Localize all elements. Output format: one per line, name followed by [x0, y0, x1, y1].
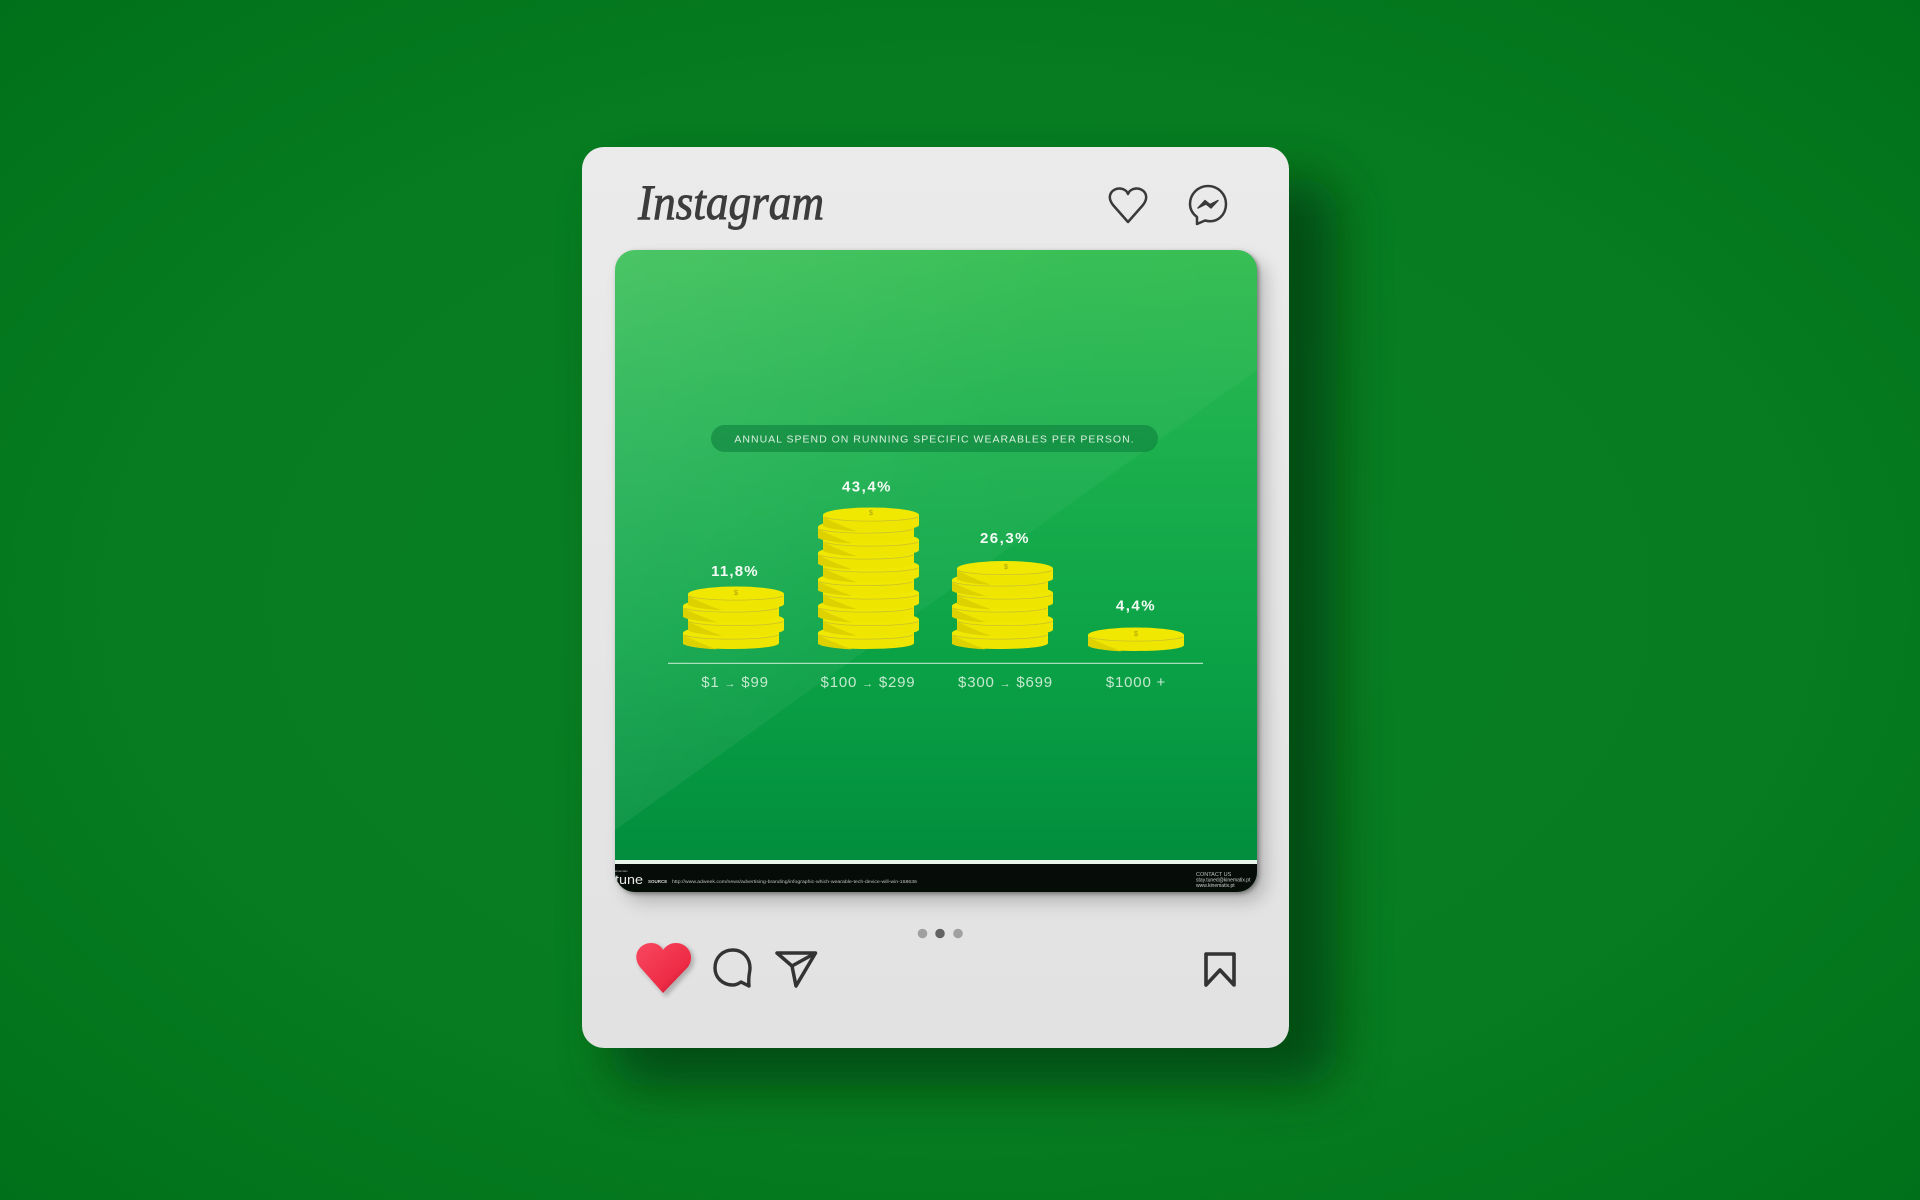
footer bar: CONTACT US — [1196, 872, 1232, 878]
header: instagram wordmark: Instagram — [637, 174, 824, 230]
icon: bookmark — [1206, 954, 1234, 985]
footer bar — [615, 860, 1257, 892]
stack: $1000 plus: 4,4% — [1116, 598, 1156, 614]
stack: $1 to $99: 11,8% — [711, 563, 759, 580]
panel: green post image — [615, 250, 1257, 892]
footer bar: kinematix — [615, 869, 628, 873]
icon: header heart — [1110, 188, 1146, 222]
chart baseline — [668, 663, 1203, 664]
stack: $1000 plus — [1088, 598, 1184, 651]
footer bar: http://www.adweek.com/news/advertising-branding/infographic-which-wearable-tech-device-will-win-168636 — [672, 879, 918, 884]
icon: send arrow — [777, 953, 816, 986]
panel shadow — [617, 252, 1266, 902]
bar chart: coin stacks — [683, 478, 1184, 651]
carousel dots — [918, 929, 963, 938]
card shadow — [612, 180, 1337, 1085]
stack: $1 to $99 — [683, 563, 784, 649]
gloss — [615, 250, 1257, 830]
card body — [582, 147, 1289, 1048]
stack: $100 to $299: 43,4% — [842, 478, 892, 496]
category labels: $100 → $299 — [821, 674, 915, 691]
category labels: $1000 + — [1106, 674, 1166, 691]
stack: $300 to $699 — [952, 530, 1053, 649]
stack: $100 to $299: $ — [869, 510, 873, 517]
icon: messenger — [1190, 186, 1226, 224]
category labels: $300 → $699 — [958, 674, 1053, 691]
heading pill — [711, 425, 1158, 452]
category labels: $1 → $99 — [701, 674, 769, 691]
stack: $1000 plus: $ — [1134, 631, 1138, 638]
stack: $1 to $99: $ — [734, 590, 738, 597]
stack: $100 to $299 — [818, 478, 919, 649]
footer bar: www.kinematix.pt — [1196, 883, 1235, 889]
category labels — [701, 676, 1165, 688]
panel: instagram post card — [582, 147, 1289, 1048]
footer bar: SOURCE — [648, 879, 667, 884]
stack: $300 to $699: $ — [1004, 564, 1008, 571]
icon: red like heart — [636, 943, 694, 997]
icon: comment bubble — [715, 950, 750, 986]
footer bar: tune — [615, 872, 643, 887]
heading pill: ANNUAL SPEND ON RUNNING SPECIFIC WEARABLES PER PERSON. — [734, 433, 1135, 445]
stack: $300 to $699: 26,3% — [980, 530, 1030, 547]
footer bar: stay.tuned@kinematix.pt — [1196, 878, 1251, 884]
